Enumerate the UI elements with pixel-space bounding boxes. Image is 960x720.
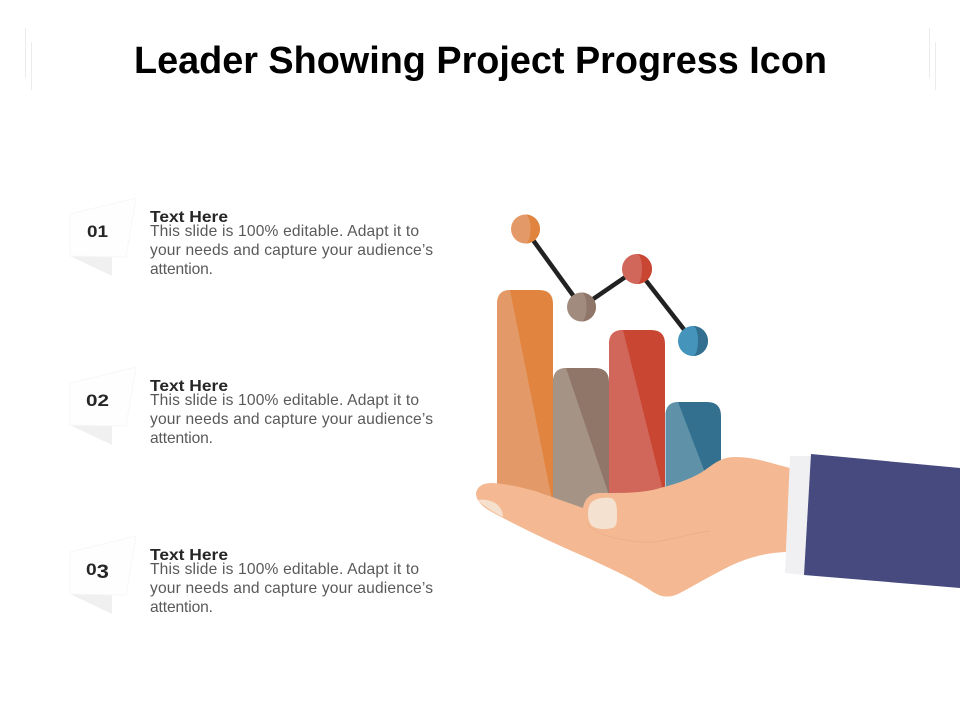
- marker: blue: [678, 326, 708, 356]
- icon: hand: [476, 457, 790, 597]
- item 03: [70, 536, 433, 616]
- line chart: [511, 214, 708, 356]
- bar: orange: [497, 290, 553, 500]
- text block 1: attention.: [150, 261, 213, 278]
- bar: red: [609, 330, 665, 505]
- marker: red: [622, 254, 652, 284]
- bar: brown: [553, 368, 609, 515]
- text block 2: attention.: [150, 430, 213, 447]
- icon: number tag 03: [70, 536, 136, 614]
- bar: blue: [666, 402, 721, 500]
- bar chart: [497, 290, 721, 515]
- text block 1: [150, 223, 433, 278]
- text block 3: attention.: [150, 599, 213, 616]
- icon: number tag 02: [70, 367, 136, 445]
- text block 3: [150, 561, 433, 616]
- palm crease: [587, 523, 710, 542]
- text block 1: your needs and capture your audience’s: [150, 242, 433, 259]
- thumbnail: [588, 498, 617, 529]
- item 02: [70, 367, 433, 447]
- item 01: [70, 198, 433, 278]
- heading: text here 1: Text Here: [150, 209, 228, 226]
- icon: number tag 01: [70, 198, 136, 276]
- heading: text here 3: Text Here: [150, 547, 228, 564]
- jacket sleeve: [804, 454, 960, 588]
- icon: number tag 03: 0: [86, 561, 95, 579]
- text block 3: This slide is 100% editable. Adapt it to: [150, 561, 419, 578]
- heading: text here 2: Text Here: [150, 378, 228, 395]
- palm and fingers: [476, 457, 790, 597]
- marker: orange: [511, 214, 540, 244]
- text block 2: [150, 392, 433, 447]
- title: Leader Showing Project Progress Icon: [134, 40, 827, 82]
- icon: number tag 01: 01: [87, 223, 108, 241]
- icon: number tag 03: 3: [97, 562, 109, 583]
- text block 1: This slide is 100% editable. Adapt it to: [150, 223, 419, 240]
- text block 2: This slide is 100% editable. Adapt it to: [150, 392, 419, 409]
- shirt cuff: [785, 456, 811, 575]
- text block 2: your needs and capture your audience’s: [150, 411, 433, 428]
- marker: brown: [567, 292, 596, 322]
- connecting line: [525, 229, 693, 341]
- icon: number tag 02: 02: [86, 392, 109, 410]
- fingernail: [477, 500, 503, 517]
- text block 3: your needs and capture your audience’s: [150, 580, 433, 597]
